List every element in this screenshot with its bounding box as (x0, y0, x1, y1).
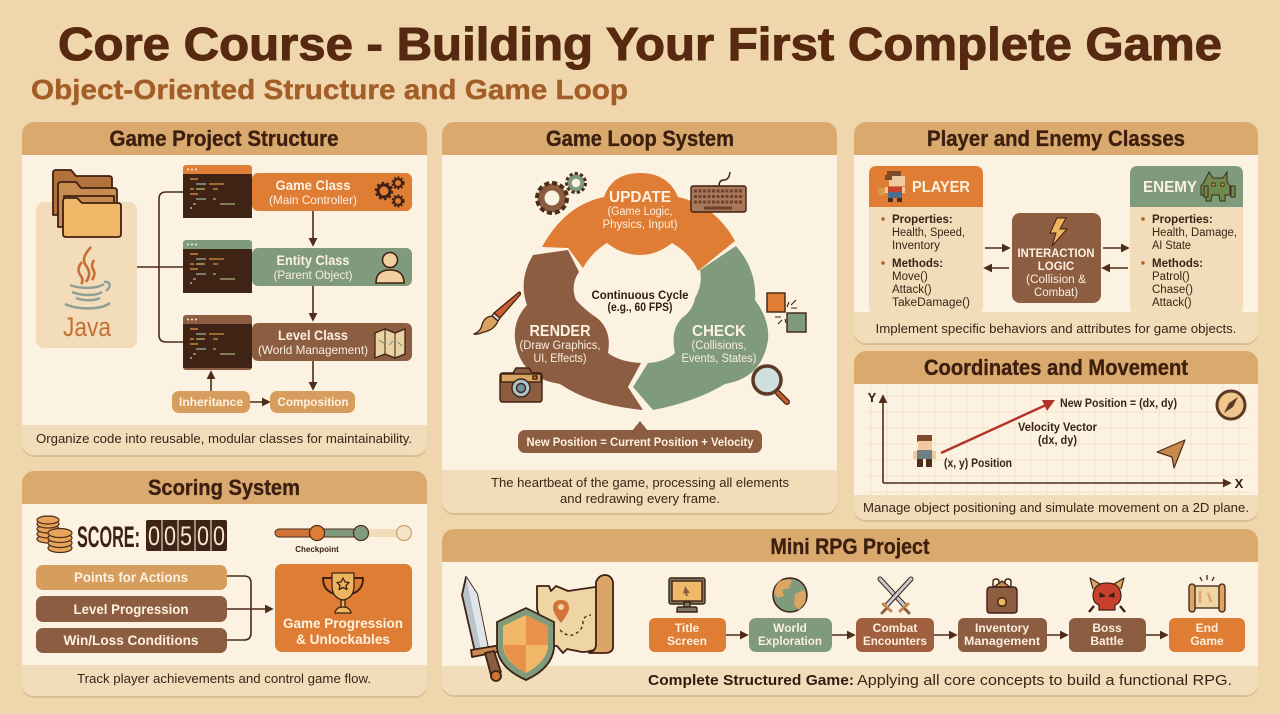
icon: compass (1217, 391, 1245, 419)
icon: monitor (669, 578, 705, 612)
icon: treasure map (537, 575, 613, 653)
java card (36, 202, 137, 348)
player card (869, 166, 983, 315)
list: player attributes: Attack() (892, 284, 932, 296)
segment: update: UPDATE (609, 189, 671, 206)
footer text: Organize code into reusable, modular classes for maintainability. (36, 431, 412, 446)
score counter: 5 (180, 521, 192, 551)
subtitle: Object-Oriented Structure and Game Loop (31, 74, 628, 105)
icon: paintbrush (474, 292, 520, 334)
footer text: Applying all core concepts to build a functional RPG. (857, 672, 1232, 689)
icon: crossed swords (880, 579, 911, 613)
icon: keyboard (691, 172, 746, 212)
segment: check: CHECK (692, 323, 746, 340)
icon: player sprite (878, 171, 905, 202)
footer text: Manage object positioning and simulate movement on a 2D plane. (863, 500, 1249, 515)
icon: person (376, 252, 404, 283)
enemy card: ENEMY (1143, 179, 1197, 196)
list: enemy attributes: Methods: (1152, 258, 1203, 270)
icon: coins (37, 516, 72, 552)
list: enemy attributes: Chase() (1152, 284, 1193, 296)
arrow (312, 361, 314, 389)
list: enemy attributes: Health, Damage, (1152, 227, 1237, 239)
step: title screen: Title (675, 621, 700, 635)
composition pill (270, 391, 355, 413)
segment: check (633, 246, 768, 410)
segment: update: (Game Logic, (608, 206, 672, 218)
axes: X (1235, 476, 1244, 491)
footer text: Track player achievements and control game flow. (77, 671, 371, 686)
icon: sword (462, 577, 508, 681)
axes (868, 390, 1244, 491)
class row: game class: (Main Controller) (269, 193, 357, 207)
footer text (491, 475, 789, 506)
list: player attributes: TakeDamage() (892, 297, 970, 309)
list: player attributes: Properties: (892, 214, 953, 226)
inheritance pill: Inheritance (179, 395, 243, 409)
panel: mini rpg project (442, 529, 1258, 697)
icon: coffee steam (78, 247, 94, 284)
score counter: 0 (148, 521, 160, 551)
step: world exploration: World (773, 621, 807, 635)
panel: scoring system (22, 471, 427, 698)
footer text: Implement specific behaviors and attributes for game objects. (876, 321, 1236, 336)
class row: entity class: (Parent Object) (274, 268, 352, 282)
step: inventory management: Inventory (975, 621, 1029, 635)
step: boss battle: Boss (1092, 621, 1122, 635)
center label (592, 290, 688, 314)
icon: cursor (1157, 440, 1185, 468)
segment: check: (Collisions, (692, 340, 746, 352)
icon: camera (500, 368, 542, 402)
icon: gears (537, 174, 586, 213)
arrows: logic to enemy (1103, 248, 1128, 268)
player card: PLAYER (912, 179, 970, 196)
step: boss battle (1069, 578, 1146, 652)
icon: shield (497, 608, 554, 680)
list: player attributes: Methods: (892, 258, 943, 270)
footer text: Complete Structured Game: (648, 672, 854, 689)
heading: Player and Enemy Classes (927, 126, 1185, 151)
arrows: player to logic (985, 248, 1009, 268)
heading: Coordinates and Movement (924, 355, 1189, 380)
icon: magnifier (753, 366, 787, 402)
icon: map (375, 329, 405, 358)
segment: render: UI, Effects) (534, 353, 587, 365)
arrow (934, 634, 956, 636)
interaction logic: Combat) (1034, 287, 1078, 299)
icon: boss skull (1089, 578, 1125, 612)
formula pill (518, 421, 762, 453)
step: world exploration (749, 578, 832, 652)
center label: (e.g., 60 FPS) (608, 302, 673, 314)
footer text (648, 672, 1232, 689)
list: player attributes: Health, Speed, (892, 227, 965, 239)
step: combat encounters: Encounters (863, 634, 927, 648)
step: inventory management: Management (964, 634, 1040, 648)
icon: lightning (1050, 218, 1067, 246)
arrow (312, 286, 314, 320)
step: title screen (649, 578, 726, 652)
arrow (250, 401, 269, 403)
segment: update (542, 173, 735, 271)
footer text: and redrawing every frame. (560, 491, 720, 506)
checkpoint slider (275, 526, 412, 554)
icon: coffee cup (65, 282, 110, 308)
list: enemy attributes: Properties: (1152, 214, 1213, 226)
icon: folders (53, 170, 121, 237)
step: combat encounters: Combat (873, 621, 917, 635)
row: level progression: Level Progression (74, 601, 188, 617)
composition pill: Composition (278, 395, 348, 409)
segment: check: Events, States) (682, 353, 757, 365)
step: world exploration: Exploration (758, 634, 822, 648)
panel: game loop system (442, 122, 837, 515)
enemy card (1130, 166, 1243, 315)
class row: game class (183, 165, 412, 218)
footer text: The heartbeat of the game, processing all elements (491, 475, 789, 490)
list: enemy attributes: Attack() (1152, 297, 1192, 309)
checkpoint slider: Checkpoint (295, 545, 339, 554)
heading: Game Loop System (546, 126, 734, 151)
score counter: SCORE: (77, 521, 140, 554)
class row: entity class (183, 240, 412, 293)
step: boss battle: Battle (1090, 634, 1124, 648)
center label: Continuous Cycle (592, 290, 688, 302)
class row: level class: (World Management) (258, 343, 368, 357)
coordinate labels: (dx, dy) (1038, 435, 1077, 447)
progression box (275, 564, 412, 652)
list: player attributes (881, 214, 970, 309)
arrow (210, 372, 212, 391)
step: end game: Game (1190, 634, 1224, 648)
connector lines (137, 192, 184, 342)
icon: globe (773, 578, 807, 612)
step: end game (1169, 575, 1245, 652)
row: win/loss conditions (36, 628, 227, 653)
arrow (312, 211, 314, 245)
arrow (726, 634, 747, 636)
list: player attributes: Inventory (892, 240, 940, 252)
icon: collision squares (767, 293, 806, 332)
progression box: Game Progression (283, 615, 403, 631)
axes: Y (868, 390, 877, 405)
score counter: 0 (197, 521, 209, 551)
score counter: 0 (164, 521, 176, 551)
icon: enemy sprite (1201, 172, 1235, 201)
connector arrows (227, 576, 272, 640)
row: level progression (36, 596, 227, 622)
class row: entity class: Entity Class (276, 253, 350, 268)
arrow (1146, 634, 1167, 636)
row: points for actions (36, 565, 227, 590)
interaction logic: (Collision & (1026, 274, 1086, 286)
heading: Scoring System (148, 475, 300, 500)
arrow (832, 634, 854, 636)
row: points for actions: Points for Actions (74, 569, 188, 585)
coordinate labels (944, 398, 1177, 470)
interaction logic: INTERACTION (1018, 248, 1094, 260)
panel: game project structure (22, 122, 427, 457)
panel: coordinates and movement (854, 351, 1258, 522)
list: enemy attributes: AI State (1152, 240, 1191, 252)
interaction logic: LOGIC (1038, 261, 1074, 273)
coordinate labels: Velocity Vector (1018, 422, 1097, 434)
java label: Java (63, 312, 112, 342)
step: combat encounters (856, 579, 934, 652)
coordinate labels: (x, y) Position (944, 458, 1012, 470)
segment: render: (Draw Graphics, (520, 340, 600, 352)
icon: trophy (323, 573, 363, 613)
segment: update: Physics, Input) (602, 219, 678, 231)
icon: scroll (1189, 575, 1225, 612)
icon: gears (376, 178, 404, 206)
panel: player and enemy classes (854, 122, 1258, 345)
step: inventory management (958, 579, 1047, 652)
interaction logic (1012, 213, 1101, 303)
arrow (1047, 634, 1067, 636)
step: end game: End (1196, 621, 1218, 635)
formula pill: New Position = Current Position + Velocity (526, 435, 754, 449)
velocity arrow (941, 400, 1055, 453)
score counter: 0 (213, 521, 225, 551)
heading: Game Project Structure (110, 126, 338, 151)
inheritance pill (172, 391, 250, 413)
icon: backpack (987, 579, 1017, 613)
segment: render: RENDER (530, 323, 591, 340)
class row: level class: Level Class (278, 328, 348, 343)
step: title screen: Screen (667, 634, 707, 648)
class row: level class (183, 315, 412, 370)
icon: player sprite (913, 435, 936, 467)
coordinate labels: New Position = (dx, dy) (1060, 398, 1177, 410)
row: win/loss conditions: Win/Loss Conditions (64, 632, 199, 648)
list: enemy attributes: Patrol() (1152, 271, 1190, 283)
list: player attributes: Move() (892, 271, 928, 283)
class row: game class: Game Class (276, 178, 350, 193)
progression box: & Unlockables (296, 631, 390, 647)
heading: Mini RPG Project (770, 534, 930, 559)
title: Core Course - Building Your First Complete Game (58, 18, 1222, 70)
segment: render (515, 250, 643, 410)
list: enemy attributes (1141, 214, 1237, 309)
